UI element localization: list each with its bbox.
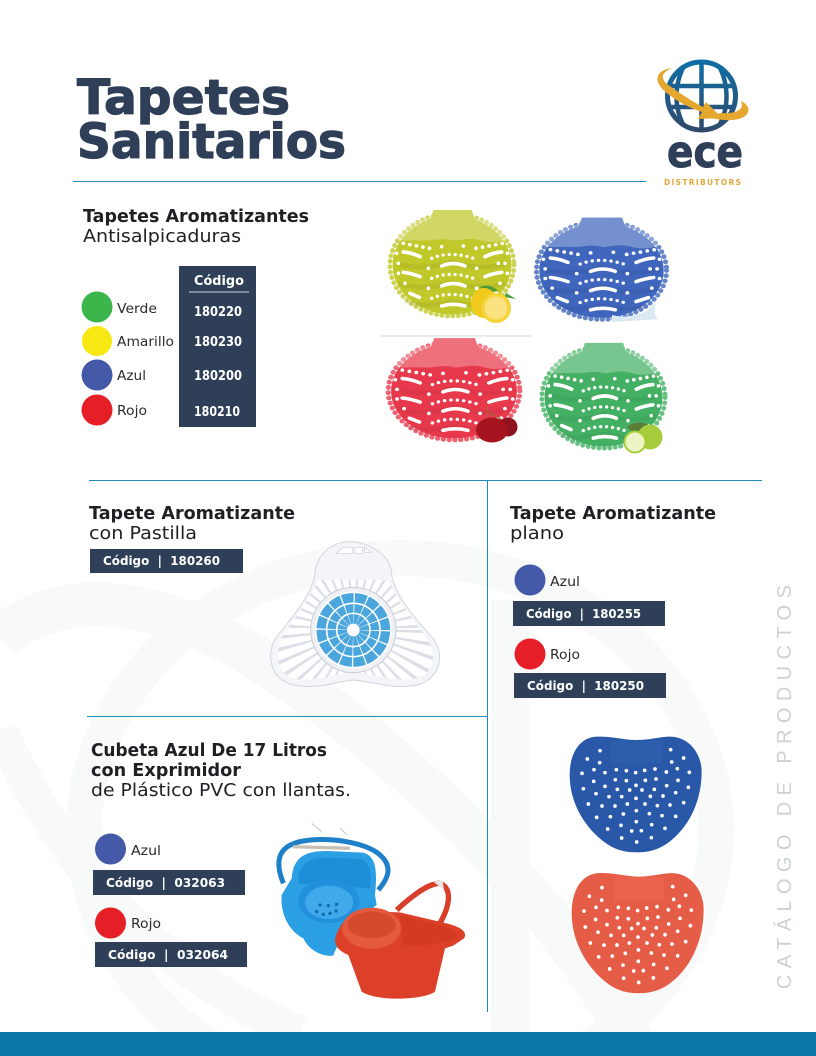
icon: apples	[624, 423, 662, 452]
code table: 180200	[194, 369, 242, 384]
divider lines	[73, 182, 762, 1012]
color labels: Rojo	[117, 404, 147, 419]
option: rojo	[514, 638, 666, 698]
icon: water splash	[612, 302, 660, 322]
icon: lemons	[471, 286, 516, 323]
color labels: Amarillo	[117, 335, 174, 350]
logo subtitle: DISTRIBUTORS	[664, 178, 741, 187]
red bucket	[335, 880, 465, 999]
panel: tapetes antisalpicaduras	[82, 206, 667, 452]
product: green wafer	[542, 343, 665, 452]
heading	[91, 740, 351, 801]
product: blue wafer	[536, 218, 667, 322]
panel: cubeta	[91, 740, 465, 999]
heading: plano	[510, 523, 564, 544]
heading	[510, 503, 716, 544]
option: rojo: Rojo	[131, 917, 161, 932]
option: rojo: Código | 032064	[108, 947, 228, 962]
heading	[89, 503, 295, 544]
color labels: Verde	[117, 302, 157, 317]
color labels: Azul	[117, 369, 146, 384]
title: Tapetes	[77, 70, 290, 126]
option: azul: Código | 032063	[106, 875, 225, 890]
option: azul: Azul	[131, 844, 161, 859]
vertical label: catálogo de productos: CATÁLOGO DE PRODUCTOS	[773, 585, 796, 989]
code table: 180230	[194, 335, 242, 350]
background watermark	[0, 558, 716, 1056]
panel: tapete con pastilla	[89, 503, 443, 687]
color swatches	[82, 292, 112, 426]
heading: Tapetes Aromatizantes	[83, 206, 309, 227]
code table	[179, 266, 256, 427]
icon: cherries	[476, 406, 518, 442]
product: red wafer	[381, 336, 532, 442]
product: yellow wafer	[390, 210, 516, 323]
option: azul	[513, 564, 665, 626]
title	[77, 70, 346, 170]
heading: Tapete Aromatizante	[89, 503, 295, 524]
code label: Código | 180260	[103, 553, 220, 568]
title: Sanitarios	[77, 114, 346, 170]
code label	[90, 549, 243, 573]
footer band	[0, 1032, 816, 1056]
option: rojo	[95, 908, 247, 967]
heading: Antisalpicaduras	[83, 226, 241, 247]
product: blue heart screen	[570, 737, 702, 852]
heading: de Plástico PVC con llantas.	[91, 780, 351, 801]
blue bucket	[279, 823, 388, 956]
option: azul: Código | 180255	[526, 606, 641, 621]
panel: tapete plano	[510, 503, 716, 993]
icon: orbit arrow	[657, 68, 748, 120]
code table: Código	[194, 274, 244, 289]
heading: Cubeta Azul De 17 Litros	[91, 740, 327, 761]
icon: globe	[668, 62, 736, 130]
color labels	[117, 302, 174, 419]
option: rojo: Rojo	[550, 648, 580, 663]
option: rojo: Código | 180250	[527, 678, 644, 693]
code table: 180210	[194, 405, 240, 420]
option: azul: Azul	[550, 575, 580, 590]
heading: con Pastilla	[89, 523, 197, 544]
logo: ece distributors	[657, 62, 748, 187]
option: azul	[93, 834, 245, 895]
code table: 180220	[194, 305, 242, 320]
product: buckets	[279, 823, 465, 999]
heading	[83, 206, 309, 247]
heading: con Exprimidor	[91, 760, 241, 781]
product: pastilla screen	[270, 542, 443, 687]
heading: Tapete Aromatizante	[510, 503, 716, 524]
product: red heart screen	[572, 873, 704, 993]
logo wordmark: ece	[667, 127, 743, 178]
